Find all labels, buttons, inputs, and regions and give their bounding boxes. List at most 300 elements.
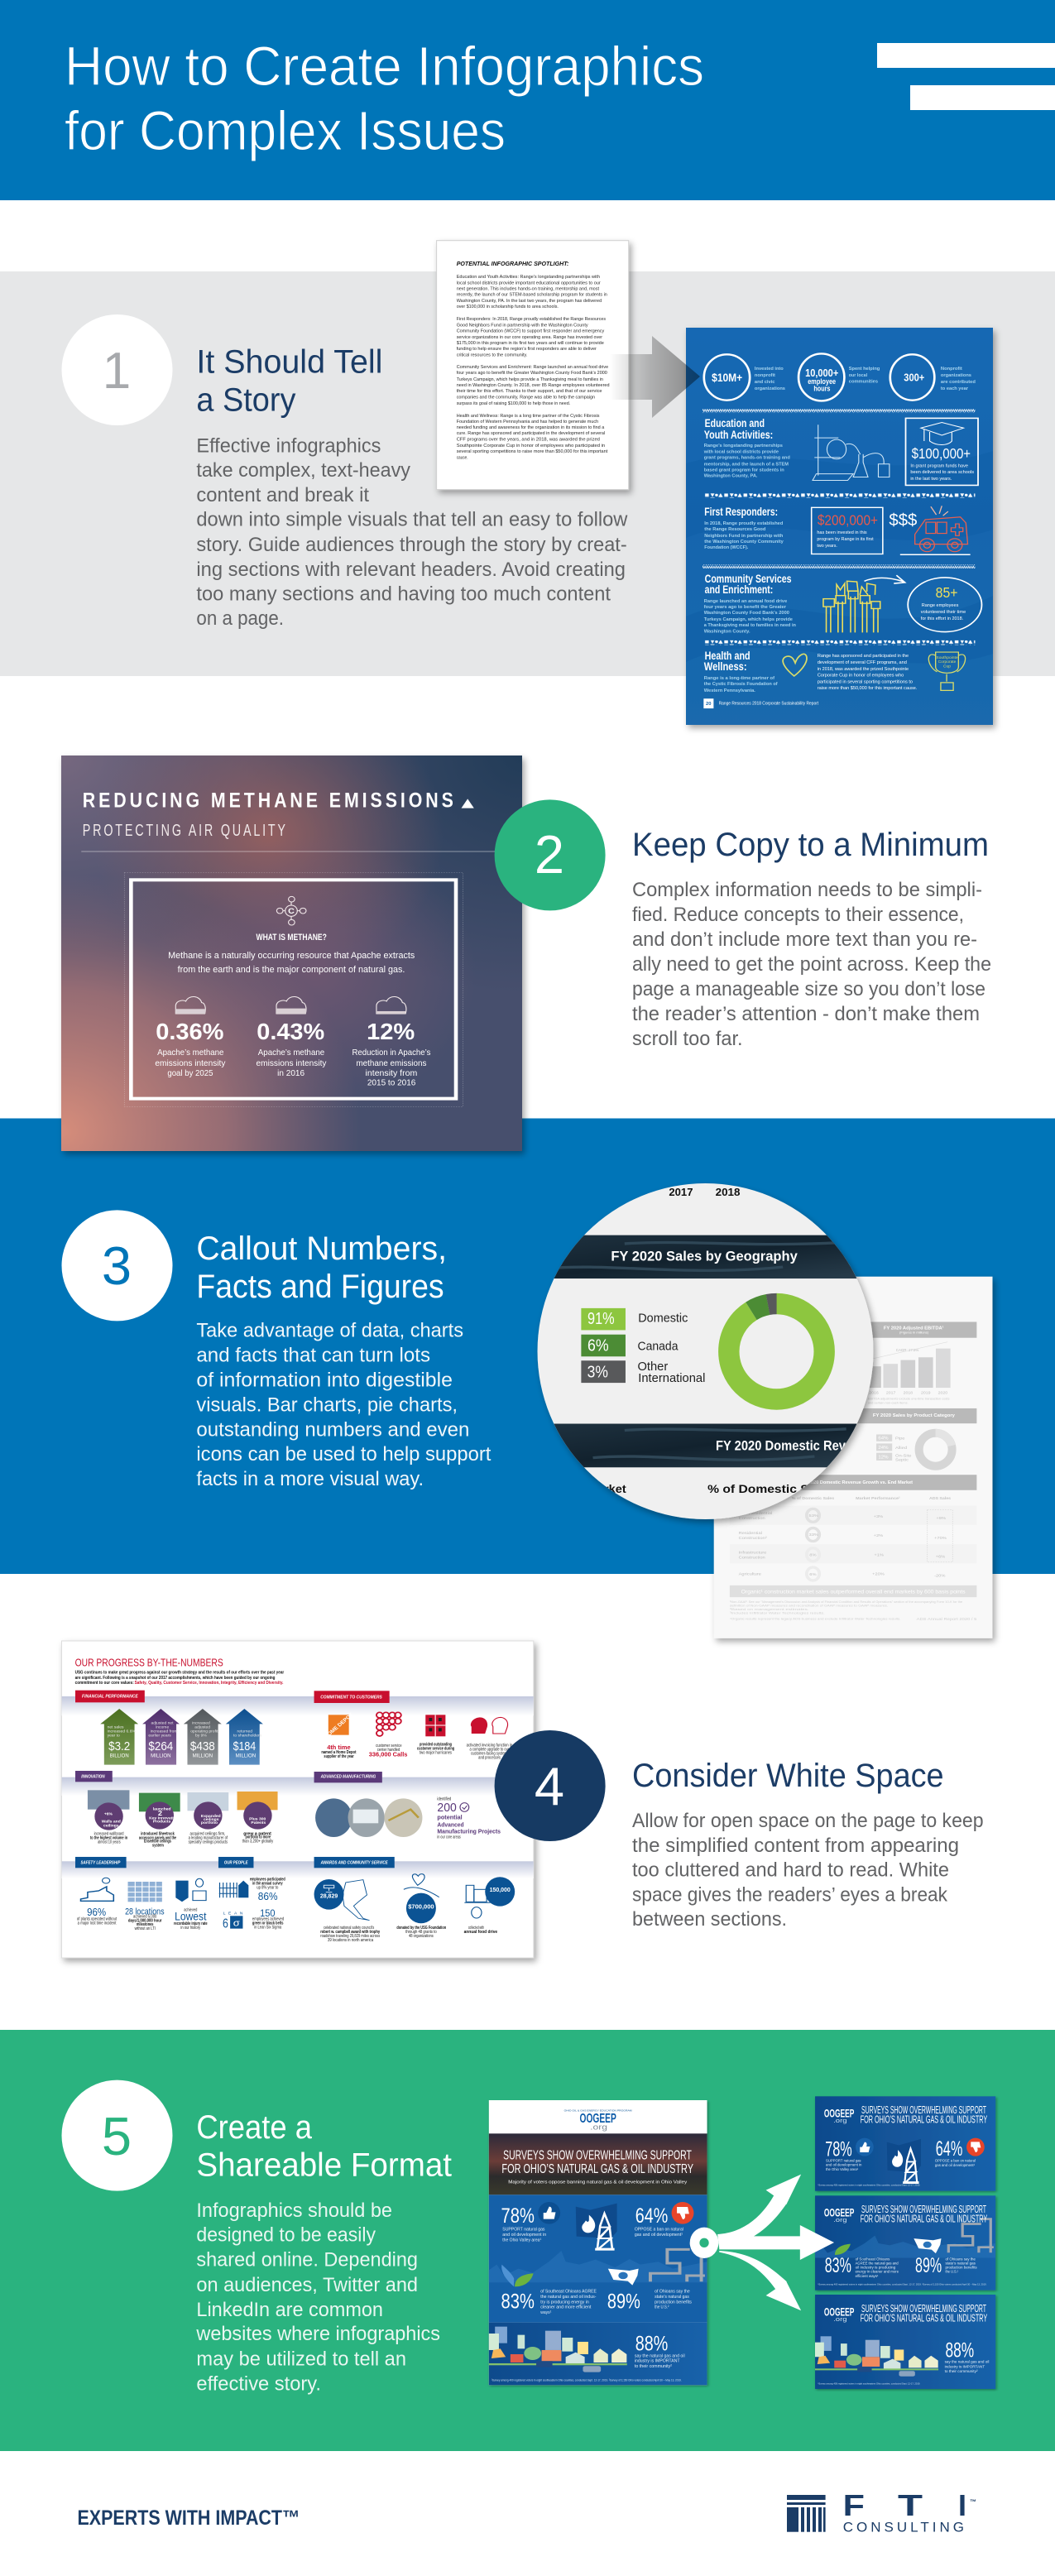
stat: 0.43%: emissions intensity — [257, 1059, 327, 1068]
legend: geography: 91% — [587, 1310, 615, 1328]
FTI Consulting logo: F — [843, 2488, 865, 2522]
poster crop: top: gas and oil development¹ — [935, 2164, 975, 2168]
poster crop: top: 78% — [825, 2137, 852, 2161]
safety row: 96% — [87, 1907, 106, 1918]
stat: 12%: 2015 to 2016 — [367, 1078, 415, 1087]
stat: 88%: to their community² — [635, 2364, 673, 2369]
stats text: to each year — [941, 386, 969, 391]
awards row — [314, 1874, 515, 1943]
customers row: provided outstanding — [420, 1743, 452, 1747]
source document page: Southpointe Corporate Cup in honor of employees who participated in — [457, 444, 605, 449]
manufacturing row — [315, 1797, 501, 1840]
end market table: +20% — [872, 1572, 885, 1576]
panel: section 5 — [0, 2030, 1055, 2451]
body text section 3: and facts that can turn lots — [196, 1344, 430, 1367]
stat: 89%: the U.S.² — [655, 2305, 669, 2310]
number badge 4: 4 — [535, 1756, 564, 1816]
source document page: Community Services and Enrichment: Range launched an annual food drive — [457, 365, 609, 370]
end market table: 8% — [809, 1553, 817, 1558]
page number footer: 20 — [706, 702, 711, 707]
financial arrows: MILLION — [151, 1753, 171, 1758]
bar chart: adjusted EBITDA: 2019 — [921, 1391, 931, 1396]
body text section 2: the reader’s attention - don’t make them — [632, 1003, 980, 1025]
stats text: organizations — [755, 386, 786, 391]
innovation row: grew a patent — [243, 1832, 271, 1836]
innovation row: portfolio to more — [246, 1835, 271, 1840]
body text section 3: icons can be used to help support — [196, 1443, 492, 1465]
source document page: Community Foundation (WCCF) to support first responder and emergency — [457, 329, 604, 333]
financial arrows: year to — [108, 1734, 120, 1738]
body text section 3: facts in a more visual way. — [196, 1468, 424, 1490]
page title and intro — [75, 1657, 285, 1686]
product category chart: 64% — [878, 1437, 889, 1442]
safety row — [77, 1878, 208, 1931]
customers row: activated invoicing function in — [467, 1744, 512, 1749]
body text section 3: outstanding numbers and even — [196, 1418, 469, 1442]
end market table: +6% — [936, 1555, 945, 1560]
body text section 5 — [195, 2199, 440, 2396]
innovation row — [88, 1790, 278, 1848]
source document page: $175,000 in this program in its first two years and will continue to provide — [457, 341, 604, 346]
stat: 0.36%: Apache’s methane — [157, 1048, 223, 1058]
people row: LEAN — [223, 1912, 242, 1916]
safety row: recordable injury rate — [174, 1921, 208, 1926]
manufacturing row: 200 — [437, 1801, 457, 1815]
body text section 5: designed to be easily — [196, 2224, 376, 2246]
awards row: roadshow traveling 29,829 miles across — [320, 1934, 380, 1939]
stat: 64% — [635, 2202, 693, 2238]
source document page: Health and Wellness: Range is a long time partner of the Cystic Fibrosis — [457, 414, 599, 419]
health text: development of several CFF programs, and — [818, 660, 907, 665]
innovation row: specialty ceilings products — [189, 1840, 228, 1844]
health text: Corporate Cup in honor of employees who — [818, 674, 904, 679]
body text section 3: of information into digestible — [196, 1369, 453, 1392]
page title and intro: OUR PROGRESS BY-THE-NUMBERS — [75, 1657, 223, 1669]
bar chart: adjusted EBITDA — [730, 1322, 976, 1404]
end market table: % of Domestic Sales — [792, 1496, 834, 1501]
customers row: customer-facing system — [471, 1752, 507, 1757]
section tabs: ADVANCED MANUFACTURING — [320, 1775, 376, 1780]
safety row: achieved — [184, 1908, 197, 1912]
FTI Consulting logo: ™ — [970, 2498, 976, 2506]
end market table: Agriculture — [739, 1572, 761, 1576]
bar chart: adjusted EBITDA: 2020 — [938, 1391, 947, 1396]
stat: 83%: 83% — [501, 2290, 535, 2313]
education block: mentorship, and the launch of a STEM — [704, 463, 789, 467]
icon: methane molecule: C — [288, 908, 295, 916]
health text: in 2018, was awarded the prized Southpointe — [818, 667, 909, 672]
icon: ambulance — [900, 506, 971, 554]
stat: 12% — [352, 996, 430, 1087]
callout: 85+ — [908, 578, 981, 632]
safety row: 28 locations — [125, 1907, 165, 1916]
highlighted note: Organic¹ construction market sales outperformed overall end markets by 600 basis points — [741, 1590, 966, 1595]
poster crop: top — [815, 2096, 995, 2191]
poster crop: middle: the U.S.² — [945, 2270, 958, 2274]
first responders block: In 2018, Range proudly established — [704, 521, 784, 526]
awards row: 28,829 — [320, 1892, 338, 1899]
financial arrows: MILLION — [193, 1753, 213, 1758]
number badge 3 — [61, 1210, 172, 1321]
body text section 4: space gives the readers’ eyes a break — [632, 1884, 948, 1907]
people row: employees participated — [250, 1878, 285, 1882]
callout: 85+: for this effort in 2018. — [921, 616, 963, 621]
methane explanation: Methane is a naturally occurring resource that Apache extracts — [168, 950, 415, 961]
product category chart: Allied — [895, 1446, 907, 1451]
callout: $100,000+: $100,000+ — [912, 445, 971, 462]
customers row: a complete upgrade to our — [469, 1748, 509, 1753]
safety row: achieved 5,000 — [133, 1915, 156, 1919]
source document page: local school districts provide important educational opportunities to our — [457, 281, 601, 285]
health block: Range is a long-time partner of — [704, 676, 774, 681]
poster crop: bottom: say the natural gas and oil — [945, 2360, 989, 2364]
footnotes: ¹Non-GAAP. See our "Management's Discussion and Analysis of Financial Condition and Results of Operations" section of the accompanying Form 10-K for the — [730, 1600, 962, 1604]
product category chart: 12% — [878, 1456, 889, 1460]
awards row: through 48 grants to — [405, 1930, 437, 1935]
stats text: our local — [849, 373, 867, 378]
bar chart: adjusted EBITDA: (Figures in millions) — [899, 1331, 929, 1334]
stats text: Nonprofit — [941, 367, 962, 372]
financial arrows: increased 6.6% — [108, 1729, 136, 1734]
methane title: PROTECTING AIR QUALITY — [83, 820, 288, 840]
stats text: are contributed — [941, 380, 976, 385]
safety row: a major lost time incident — [78, 1921, 117, 1926]
source document page: cause. — [457, 456, 468, 460]
heading: shareable format — [196, 2109, 452, 2183]
table header zoomed — [606, 1485, 807, 1493]
awards row: celebrated national safety council’s — [324, 1926, 374, 1931]
poster crop: middle: oil industry is producing — [856, 2266, 895, 2270]
community services block: four years ago to benefit the Greater — [704, 605, 787, 610]
stat: 0.43%: Apache’s methane — [258, 1048, 324, 1058]
poster logo: .org — [590, 2123, 607, 2132]
heading: it should tell a story: It Should Tell — [196, 344, 382, 381]
heading: it should tell a story — [196, 344, 382, 419]
awards row: 39 locations in north america — [328, 1938, 373, 1943]
safety row: in our history — [180, 1926, 200, 1931]
customers row: 4th time — [327, 1744, 351, 1751]
source document page: POTENTIAL INFOGRAPHIC SPOTLIGHT: — [457, 261, 569, 267]
body text section 5: websites where infographics — [195, 2323, 440, 2345]
source document page: next generation. This includes hands-on training, mentorship and, most — [457, 287, 599, 291]
band: sales by geography: FY 2020 Sales by Geography — [611, 1249, 798, 1264]
FTI Consulting logo: I — [958, 2488, 966, 2522]
customers row: center handled — [377, 1748, 400, 1753]
legend: geography: 3% — [587, 1363, 608, 1381]
innovation row: 2 — [158, 1810, 162, 1817]
end market table: -20% — [934, 1574, 946, 1578]
stat: 0.36%: emissions intensity — [155, 1059, 226, 1068]
callout: $200,000+ — [812, 507, 883, 554]
footnotes: ²Based on management estimates. — [730, 1607, 809, 1611]
customers row: supplier of the year — [324, 1754, 354, 1759]
stats text: employee — [808, 377, 836, 386]
source document page: surpass its goal of raising $100,000 to help those in need. — [457, 401, 571, 406]
innovation row: acquired ceilings firm, — [190, 1832, 226, 1836]
body text section 1: on a page. — [196, 607, 284, 630]
number badge 2 — [495, 799, 606, 910]
callout: $200,000+: program by Range in its first — [817, 537, 874, 542]
customers row: 336,000 Calls — [369, 1751, 408, 1758]
body text section 1 — [196, 435, 628, 630]
band: domestic: FY 2020 Domestic Revenue — [716, 1438, 874, 1453]
poster crop: top: SUPPORT natural gas — [826, 2159, 861, 2163]
poster logo: OHIO OIL & GAS ENERGY EDUCATION PROGRAM — [564, 2109, 632, 2112]
people row: up 8% year to — [257, 1886, 278, 1890]
financial arrows: to shareholders — [233, 1734, 262, 1738]
source document page: recently, the launch of our STEM-based scholarship program for students in — [457, 293, 607, 297]
stat: 0.43% — [257, 996, 327, 1078]
heading: it should tell a story: a Story — [196, 382, 295, 419]
body text section 1: too many sections and having too much content — [196, 583, 611, 606]
stat: 78%: 78% — [501, 2204, 535, 2228]
poster crop: middle: of Southeast Ohioans — [856, 2257, 890, 2262]
footnotes: definition of Non-GAAP measures and reconciliation of GAAP measures to GAAP measures. — [730, 1604, 888, 1607]
stat: 12%: methane emissions — [356, 1059, 426, 1068]
body text section 1: Effective infographics — [196, 435, 381, 457]
customers row: named a Home Depot — [321, 1750, 357, 1755]
footnotes — [730, 1600, 977, 1622]
body text section 1: take complex, text-heavy — [196, 459, 410, 482]
legend: geography: Other — [638, 1360, 668, 1374]
stat: 78% — [501, 2202, 560, 2243]
source document page: four years ago to benefit the Greater Washington County Food Bank’s 2000 — [457, 371, 607, 376]
stat: 64%: gas and oil development¹ — [635, 2233, 683, 2238]
poster crop: bottom: ¹Survey among 400 registered voters in eight southeastern Ohio counties, conducted Sept. 12-17, 2019. — [818, 2382, 920, 2385]
report sheet (faded) — [714, 1277, 993, 1638]
people row: 6 — [223, 1916, 228, 1931]
source document page: CFF programs over the years, and in 2018, was awarded the prized — [457, 438, 600, 442]
stat: 78%: and oil development in — [502, 2233, 546, 2238]
body text section 1: ing sections with relevant headers. Avoid creating — [196, 559, 626, 581]
poster crop: middle: AGREE the natural gas and — [856, 2262, 899, 2266]
end market table: +9% — [936, 1516, 946, 1521]
body text section 2: fied. Reduce concepts to their essence, — [632, 904, 964, 926]
customers row: and processes — [478, 1756, 501, 1761]
poster crop: middle: of Ohioans say the — [945, 2257, 976, 2262]
panel: section 1 — [0, 271, 1055, 676]
page number footer — [703, 698, 818, 708]
arrows: one to many — [690, 2175, 834, 2310]
callout: $100,000+: in the last two years. — [910, 477, 952, 482]
number badge 5 — [61, 2080, 172, 2191]
footnotes: ³Includes Infiltrator Water Technologies results. — [730, 1611, 825, 1615]
stat: 88%: 88% — [635, 2332, 668, 2356]
body text section 5: on audiences, Twitter and — [196, 2274, 418, 2296]
source document page: several sporting competitions to raise more than $50,000 for this important — [457, 449, 608, 454]
number badge 1 — [61, 314, 172, 425]
callout: $200,000+: two years. — [817, 544, 837, 549]
stat: 12%: Reduction in Apache’s — [352, 1048, 430, 1058]
heading: callout numbers: Callout Numbers, — [196, 1230, 447, 1267]
arrow: copy to infographic — [609, 336, 700, 418]
body text section 2 — [632, 879, 991, 1050]
stat: 83%: try is producing energy in — [540, 2300, 589, 2305]
innovation row: increased wallboard — [94, 1832, 124, 1836]
poster crop: middle — [815, 2195, 995, 2291]
dollar signs: $$$ — [889, 510, 917, 530]
stats text: nonprofit — [755, 373, 775, 378]
poster crop: middle: energy in cleaner and more — [856, 2270, 899, 2274]
education block: Education and — [705, 417, 765, 430]
financial arrows: earlier years — [148, 1734, 171, 1738]
education block: based grant program for students in — [704, 468, 784, 473]
callout: 85+: 85+ — [936, 584, 957, 601]
callout: 85+: Range employees — [922, 603, 958, 608]
innovation row: Plus 300 — [249, 1817, 266, 1820]
first responders block: Neighbors Fund in partnership with — [704, 534, 784, 539]
people row: in Lean Six Sigma — [254, 1926, 281, 1930]
end market table: Infrastructure — [739, 1551, 766, 1556]
manufacturing row: identified — [437, 1797, 451, 1802]
footnotes: ADS Annual Report 2020 / 5 — [917, 1617, 977, 1622]
innovation row: ceilings — [204, 1817, 219, 1821]
end market table: Construction² — [739, 1536, 767, 1541]
stat: 0.43%: 0.43% — [257, 1019, 324, 1044]
stat: 78%: SUPPORT natural gas — [502, 2227, 545, 2232]
stat: 83%: of Southeast Ohioans AGREE — [540, 2289, 597, 2294]
page title and intro: Safety, Quality, Customer Service, Innovation, Integrity, Efficiency and Diversity. — [135, 1681, 284, 1686]
heading: keep copy: Keep Copy to a Minimum — [632, 827, 989, 863]
stats text: hours — [813, 385, 831, 393]
awards row: $700,000 — [408, 1903, 434, 1910]
financial arrows: $264 — [148, 1740, 173, 1753]
title: for Complex Issues — [65, 100, 506, 162]
source document page: critical resources to the community. — [457, 353, 528, 357]
number badge 5: 5 — [102, 2106, 132, 2166]
stat: 64%: 64% — [635, 2204, 668, 2228]
first responders block — [704, 506, 784, 550]
health text: Range has sponsored and participated in the — [818, 654, 909, 659]
methane sample infographic — [61, 756, 522, 1151]
years: 2018 — [716, 1187, 741, 1198]
page number footer: Range Resources 2018 Corporate Sustainability Report — [719, 702, 818, 707]
innovation row: Key Innovative — [149, 1816, 179, 1820]
community services block: Community Services — [705, 573, 792, 586]
community services block: a Thanksgiving meal to families in need in — [704, 623, 796, 628]
innovation row: Patents — [251, 1820, 266, 1825]
first responders block: the Range Resources Good — [704, 527, 766, 532]
manufacturing row: potential — [437, 1814, 463, 1820]
end market table: +70% — [934, 1536, 947, 1541]
body text section 4: too cluttered and hard to read. White — [632, 1859, 949, 1882]
education block: Range’s longstanding partnerships — [704, 444, 784, 449]
awards row: annual food drive — [464, 1930, 497, 1935]
legend: geography: International — [638, 1372, 705, 1384]
end market table: 2020 Domestic Revenue Growth vs. End Market — [808, 1480, 913, 1485]
methane frame — [131, 880, 456, 1099]
stats text: $10M+ — [712, 372, 742, 385]
people row: σ — [233, 1917, 240, 1928]
poster crop: top: OOGEEP — [824, 2107, 854, 2120]
stat: 88% — [635, 2332, 685, 2369]
number badge 3: 3 — [102, 1235, 132, 1296]
community services block: and Enrichment: — [705, 583, 773, 597]
donut chart: sales by geography — [729, 1304, 824, 1399]
page title and intro: USG continues to make great progress against our growth strategy and the results of our efforts over the past year — [75, 1671, 285, 1676]
body text section 2: ally need to get the point across. Keep the — [632, 953, 991, 976]
heading: consider white space: Consider White Space — [632, 1758, 944, 1794]
methane explanation — [168, 933, 415, 975]
people row: 86% — [258, 1891, 278, 1902]
stat: 88%: say the natural gas and oil — [635, 2353, 685, 2358]
innovation row: accessory panels and the — [139, 1836, 176, 1840]
awards row: robert w. campbell award with trophy — [320, 1930, 380, 1935]
icon: lab glassware — [813, 425, 890, 481]
icon: heart — [783, 654, 807, 676]
education block — [703, 417, 790, 478]
innovation row: ceilings — [103, 1824, 119, 1827]
innovation row: Ensemble ceilings — [144, 1840, 171, 1844]
source document page: companies and the community, Range was able to help the campaign — [457, 396, 595, 401]
section tabs: FINANCIAL PERFORMANCE — [82, 1695, 138, 1700]
customers row — [321, 1712, 512, 1761]
financial arrows: by 9% — [195, 1734, 207, 1738]
community services block — [704, 573, 796, 634]
stats text: Invested into — [755, 367, 784, 372]
end market table — [730, 1475, 976, 1581]
health block: Health and — [705, 650, 750, 663]
methane explanation: from the earth and is the major component of natural gas. — [178, 964, 405, 975]
methane title — [83, 788, 474, 840]
poster crop: middle: 83% — [825, 2254, 851, 2277]
section tabs: INNOVATION — [81, 1775, 105, 1780]
health text: participated in several sporting competitions to — [818, 680, 914, 685]
financial arrows: income — [156, 1725, 170, 1729]
end market table: 33% — [809, 1533, 818, 1537]
poster headline — [501, 2147, 693, 2185]
body text section 3: visuals. Bar charts, pie charts, — [196, 1394, 458, 1417]
safety row: of plants operated without — [77, 1917, 117, 1921]
stat: 0.43%: in 2016 — [277, 1069, 305, 1078]
stats text: and civic — [755, 380, 775, 385]
poster crop: bottom: to their community² — [945, 2370, 978, 2374]
legend: geography — [581, 1308, 705, 1384]
heading: shareable format: Shareable Format — [196, 2147, 452, 2183]
financial arrows: adjusted net — [151, 1721, 174, 1725]
product category chart: 24% — [878, 1446, 889, 1451]
stat: 0.36%: 0.36% — [156, 1019, 223, 1044]
body text section 1: content and break it — [196, 484, 369, 506]
education block: grant programs, hands-on training and — [704, 456, 790, 460]
body text section 4: between sections. — [632, 1908, 787, 1931]
financial arrows: BILLION — [110, 1753, 129, 1758]
poster crop: middle: production benefits — [945, 2266, 977, 2270]
end market table: Construction — [739, 1516, 765, 1521]
end market table: +2% — [874, 1533, 883, 1538]
footer tagline: EXPERTS WITH IMPACT™ — [78, 2506, 300, 2530]
poster crop: bottom: 88% — [945, 2339, 974, 2362]
legend: geography: 6% — [587, 1336, 609, 1355]
source document page: Washington County, PA. In the last two years, the program has delivered — [457, 299, 602, 304]
body text section 1: down into simple visuals that tell an easy to follow — [196, 508, 628, 531]
poster crop: middle: state’s natural gas — [945, 2262, 976, 2266]
product category chart: Septic — [895, 1458, 909, 1462]
section tabs: OUR PEOPLE — [224, 1861, 248, 1865]
body text section 5: Infographics should be — [196, 2199, 392, 2222]
stat: 83% — [501, 2265, 597, 2315]
innovation row: almost 10 years — [98, 1840, 121, 1844]
stat: 83%: cleaner and more efficient — [540, 2305, 592, 2310]
number badge 4 — [495, 1730, 606, 1841]
innovation row: Walls and — [102, 1820, 121, 1824]
innovation row: portfolio — [201, 1820, 218, 1825]
methane title: REDUCING METHANE EMISSIONS — [83, 788, 457, 812]
education block: Youth Activities: — [704, 429, 773, 442]
manufacturing row: Manufacturing Projects — [437, 1828, 501, 1835]
safety row: Lowest — [175, 1911, 207, 1923]
stat: 83%: ways¹ — [540, 2310, 552, 2315]
